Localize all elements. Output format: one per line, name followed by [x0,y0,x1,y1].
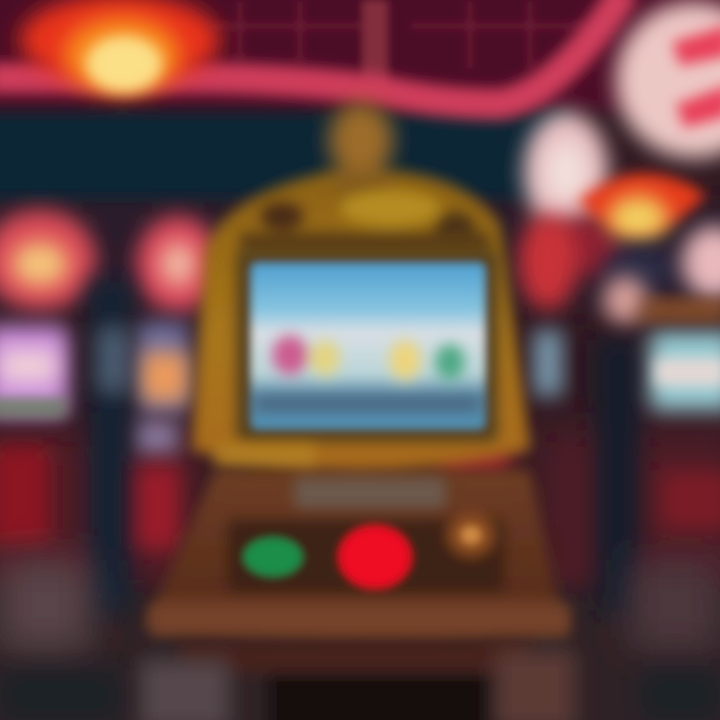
screen frame [236,250,498,442]
icon: right round sign [524,112,625,275]
icon: green button [243,537,303,577]
icon: left lamp [0,210,96,310]
icon: top-right round sign [616,2,720,158]
icon: far-right sign [518,214,720,324]
control deck [215,445,445,508]
icon: amber button [447,513,495,557]
machine base ledge [150,604,570,636]
red side machine bases [0,436,720,550]
neon pink band [0,0,625,104]
topper figure [329,102,393,196]
machine lower cabinet [145,470,565,639]
icon: second left lamp [136,216,220,312]
button panel [228,520,504,592]
left machine screen [0,326,68,416]
floor and dark opening [0,560,720,720]
ceiling grid [210,0,590,90]
topper marquee details [240,190,490,254]
right machine screen [534,300,720,410]
icon: red button [338,525,412,589]
slot machine [145,102,570,639]
dark pillars [88,280,640,610]
reel symbols [255,335,480,413]
second left machine screen [132,322,188,454]
icon: right hanging lamp [578,174,706,290]
screen [251,263,485,429]
machine upper cabinet [192,172,530,470]
icon: top-left lamp [20,0,220,93]
